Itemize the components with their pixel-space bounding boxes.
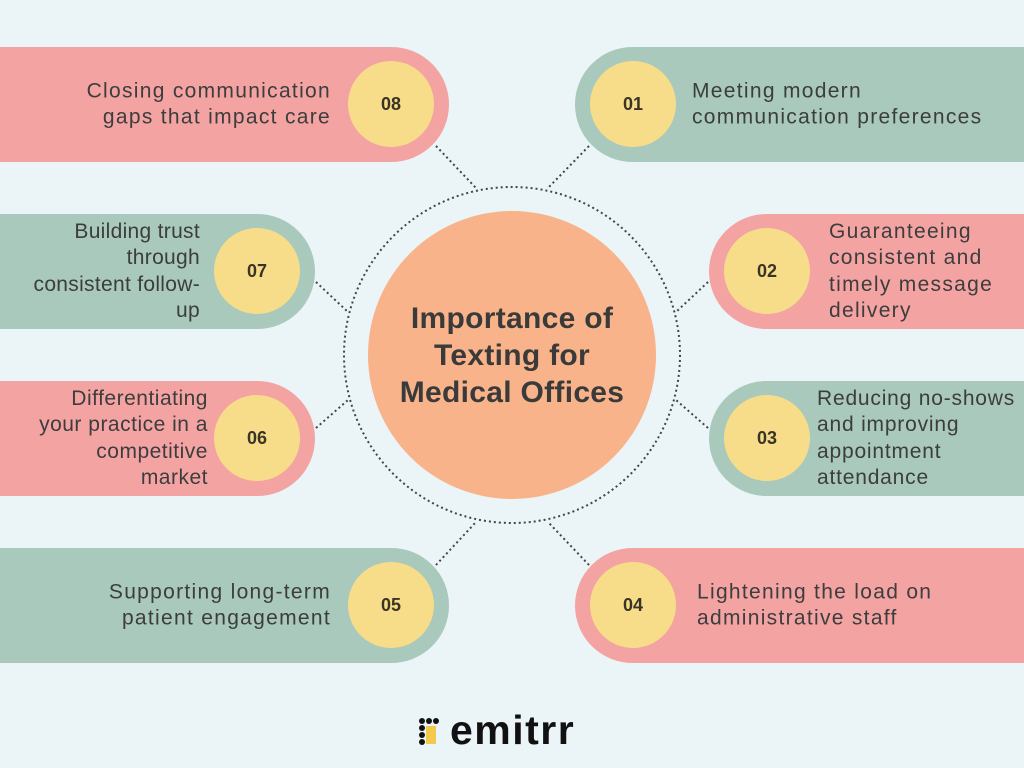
item 06: your practice in a — [39, 413, 208, 436]
item 06: market — [141, 466, 208, 489]
item 01: 01 — [623, 94, 643, 114]
item 05: 05 — [381, 594, 401, 614]
item 07: consistent follow- — [34, 272, 200, 296]
item 04: 04 — [623, 594, 643, 614]
center circle title: Importance of — [411, 302, 613, 334]
item 05 — [0, 548, 449, 663]
item 01: Meeting modern — [692, 79, 862, 102]
item 01 — [575, 47, 1024, 162]
item 03: 03 — [757, 428, 777, 448]
item 08: gaps that impact care — [103, 106, 331, 128]
item 07: up — [176, 299, 200, 322]
item 06 — [0, 381, 315, 496]
item 02: Guaranteeing — [829, 220, 972, 242]
item 04: Lightening the load on — [697, 580, 932, 603]
item 02: timely message — [829, 272, 993, 296]
item 07: 07 — [247, 260, 267, 280]
item 06: competitive — [96, 440, 208, 462]
item 07: Building trust — [74, 220, 200, 242]
item 03: appointment — [817, 440, 941, 462]
item 02: 02 — [757, 260, 777, 280]
item 08: 08 — [381, 94, 401, 114]
item 03: attendance — [817, 466, 929, 489]
item 03: and improving — [817, 413, 959, 436]
item 05: patient engagement — [122, 606, 331, 630]
center circle title — [368, 211, 656, 499]
center circle title: Texting for — [434, 338, 590, 372]
item 03 — [709, 381, 1024, 496]
item 02 — [709, 214, 1024, 329]
item 08: Closing communication — [87, 79, 331, 102]
item 06: 06 — [247, 428, 267, 448]
item 04 — [575, 548, 1024, 663]
logo: emitrr: emitrr — [450, 706, 575, 752]
item 07: through — [127, 246, 200, 269]
item 02: delivery — [829, 299, 912, 322]
center circle title: Medical Offices — [400, 376, 624, 408]
item 08 — [0, 47, 449, 162]
item 05: Supporting long-term — [109, 580, 331, 603]
item 02: consistent and — [829, 246, 983, 269]
item 01: communication preferences — [692, 106, 982, 128]
item 06: Differentiating — [71, 386, 208, 410]
item 04: administrative staff — [697, 606, 898, 630]
item 03: Reducing no-shows — [817, 386, 1015, 410]
item 07 — [0, 214, 315, 329]
